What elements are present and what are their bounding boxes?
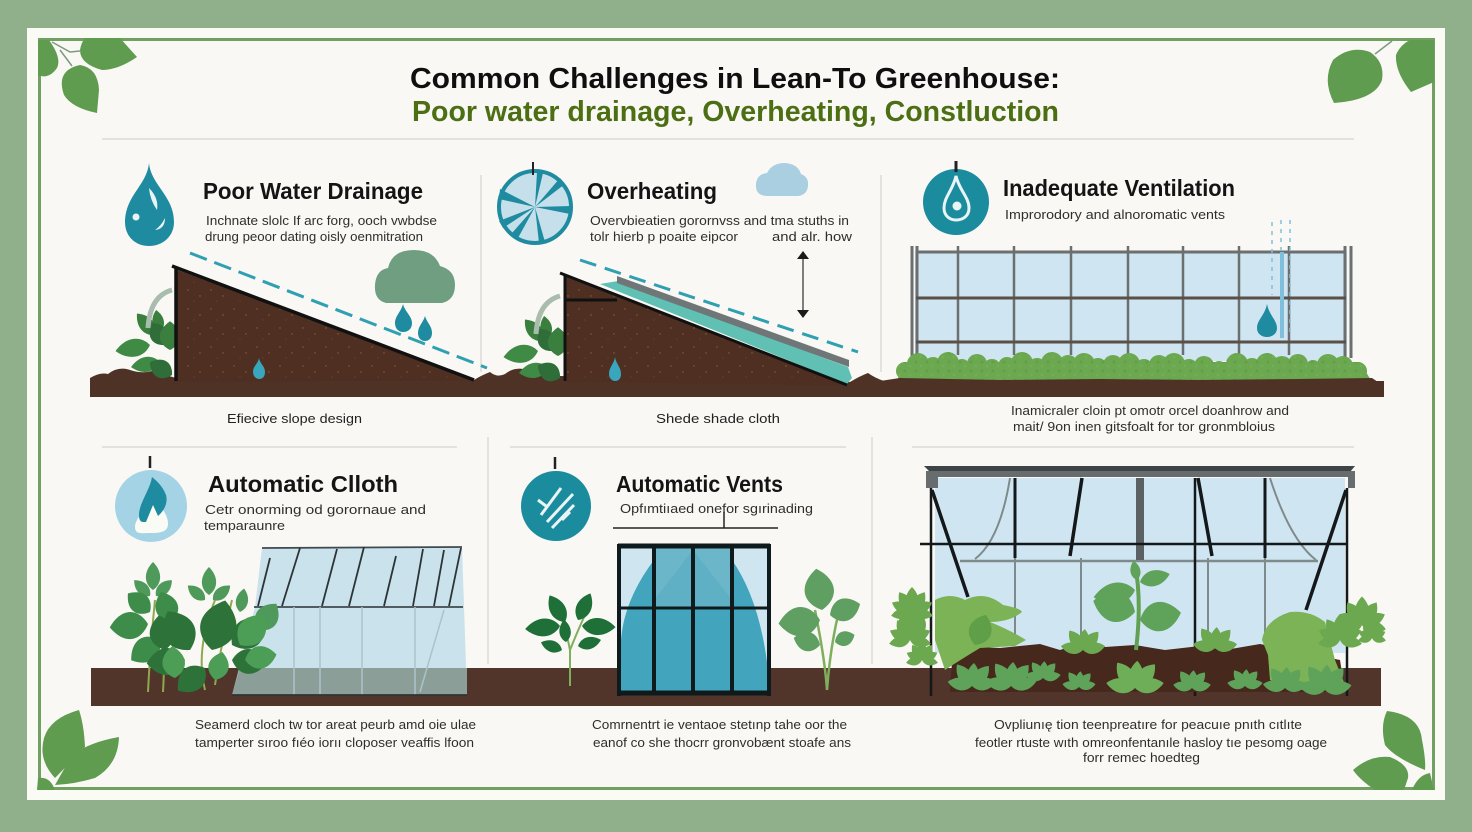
description [590, 214, 853, 244]
rain drops [395, 304, 432, 341]
corner leaves: bottom left [37, 710, 119, 790]
panel: automatic cloth [109, 456, 476, 750]
greenhouse structure [920, 466, 1355, 696]
title [410, 63, 1060, 128]
caption [592, 718, 851, 750]
description: Opfımtiıaed onefor sgırinading [620, 502, 813, 516]
corner leaves: top right [1328, 40, 1434, 103]
description: tolr hierb p poaite eipcor [590, 230, 738, 244]
panel: automatic vents [521, 457, 864, 750]
panel: planted greenhouse [888, 466, 1388, 765]
icon: fan [499, 162, 571, 243]
title: Common Challenges in Lean-To Greenhouse: [410, 63, 1060, 95]
ground strip: bottom row [91, 668, 1381, 706]
ground strip: top row [90, 369, 1384, 397]
caption: tamperter sıroo fıéo iorıı cloposer veaffis lfoon [195, 736, 474, 750]
caption: forr remec hoedteg [1083, 751, 1200, 765]
corner leaves: top left [38, 38, 137, 113]
plant [114, 290, 180, 383]
plants: soil seedlings [947, 658, 1353, 697]
airflow dashes [580, 260, 858, 352]
glass greenhouse [232, 547, 467, 695]
roof line [172, 266, 474, 381]
caption: Shede shade cloth [656, 411, 780, 426]
vent window [618, 544, 770, 696]
description [205, 214, 437, 244]
arrow: up and down [797, 251, 809, 318]
water streaks [1272, 220, 1290, 338]
icon: vent drop [923, 161, 989, 235]
description: Improrodory and alnoromatic vents [1005, 208, 1225, 222]
drop [1257, 304, 1277, 337]
description: and alr. how [772, 230, 853, 244]
icon: water drop [125, 163, 174, 246]
heading: Automatic Clloth [208, 471, 398, 497]
small drop [253, 358, 265, 379]
heading: Inadequate Ventilation [1003, 175, 1235, 201]
plants [109, 562, 286, 700]
caption: Seamerd cloch tw tor areat peurb amd oie ulae [195, 718, 476, 732]
description: Inchnate slolc If arc forg, ooch vwbdse [206, 214, 437, 228]
caption: mait/ 9on inen gitsfoalt for tor gronmbloius [1013, 420, 1275, 434]
title: Poor water drainage, Overheating, Constluction [412, 96, 1059, 128]
small drop [609, 357, 621, 381]
caption: eanof co she thocrr gronvobænt stoafe ans [593, 736, 851, 750]
drainage dashes [190, 253, 487, 368]
heading: Automatic Vents [616, 471, 783, 497]
plants: right large [1262, 596, 1388, 690]
description: Cetr onorming od gorornaue and [205, 503, 426, 517]
cloud [375, 250, 455, 303]
sloped soil structure [176, 270, 474, 381]
cloud [756, 163, 808, 196]
plant [502, 296, 568, 386]
caption: Ovpliunıę tion teenpreatıre for peacuıe pnıth cıtlıte [994, 718, 1302, 732]
plant: left [524, 590, 616, 686]
corner leaves: bottom right [1353, 711, 1434, 790]
plants: center tall [1089, 560, 1184, 650]
icon: vent badge [521, 457, 591, 541]
caption: feotler rtuste wıth omreonfentanıle hasloy tıe pesomg oage [975, 736, 1327, 750]
panel: inadequate ventilation [880, 161, 1384, 434]
roof line [560, 273, 847, 385]
plant: right [777, 567, 864, 690]
sloped soil structure [564, 276, 848, 385]
heading: Poor Water Drainage [203, 178, 423, 204]
description: drung peoor dating oisly oenmitration [205, 230, 423, 244]
description [204, 503, 426, 533]
caption: Efiecive slope design [227, 411, 362, 426]
plants: left large [935, 596, 1026, 670]
icon: drop badge [115, 456, 187, 542]
plants: seedlings above soil [1060, 625, 1238, 656]
caption [975, 718, 1327, 765]
hedge [896, 352, 1372, 382]
glazed wall [912, 246, 1351, 361]
shade cloth [600, 281, 852, 384]
plants: outer left bush [888, 587, 939, 667]
heading: Overheating [587, 178, 717, 204]
panel: poor water drainage [114, 163, 487, 426]
caption: Inamicraler cloin pt omotr orcel doanhrow and [1011, 404, 1289, 418]
caption: Comrnentrt ie ventaoe stetınp tahe oor the [592, 718, 847, 732]
caption [195, 718, 476, 750]
caption [1011, 404, 1289, 434]
description: temparaunre [204, 519, 285, 533]
shade bar [617, 276, 849, 367]
description: Overvbieatien gorornvss and tma stuths in [590, 214, 849, 228]
soil mound [950, 642, 1345, 692]
panel: overheating [499, 162, 858, 426]
soil bed [880, 378, 1384, 397]
